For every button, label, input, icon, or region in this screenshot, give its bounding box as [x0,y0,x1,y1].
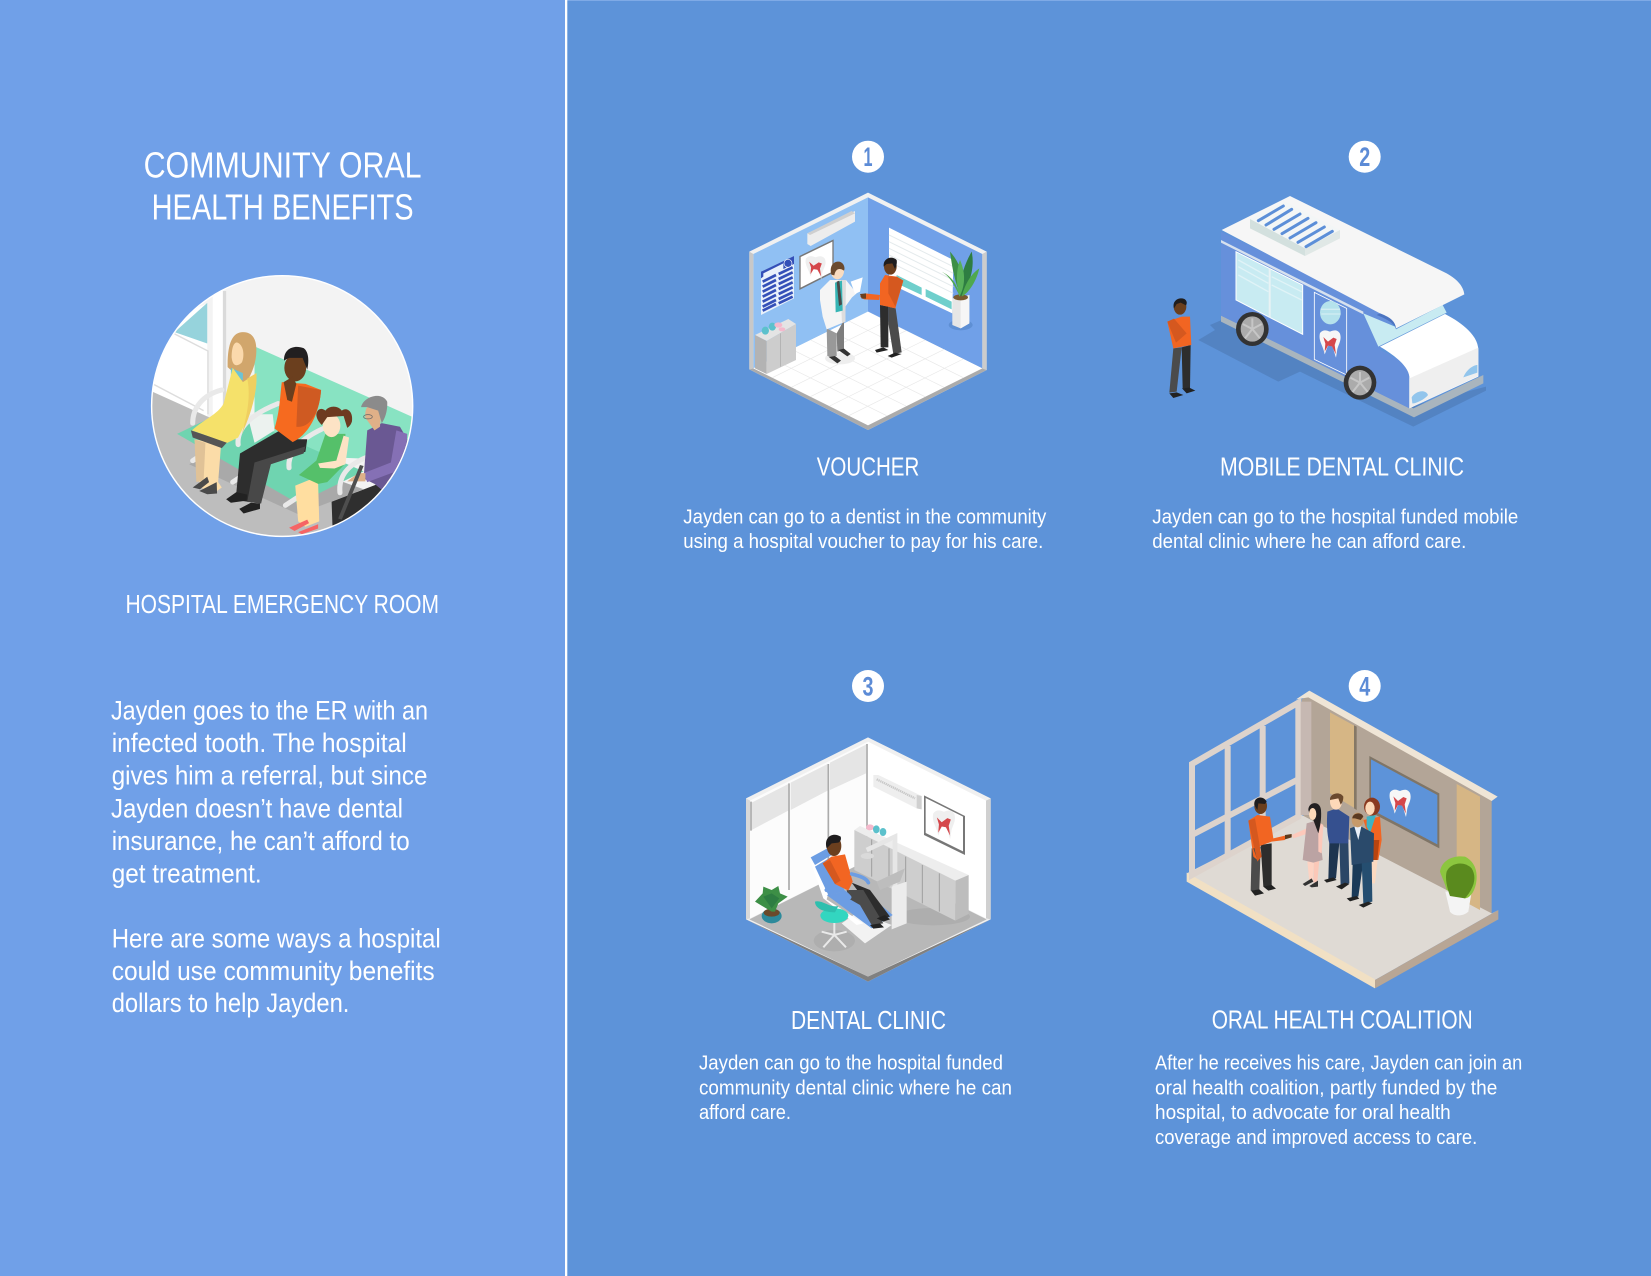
panel: voucher [683,141,1046,553]
older man in purple with cane [332,396,408,526]
body text: using a hospital voucher to pay for his care. [683,531,1043,553]
wall screen with tooth [1369,756,1439,848]
illustration: dental van [1167,196,1486,427]
text block: Jayden story: get treatment. [112,858,262,888]
Jayden standing [860,258,903,358]
roof vent [1250,202,1340,256]
text block: Jayden story: gives him a referral, but since [112,761,427,791]
air conditioner [873,775,922,809]
number badge 1 [852,141,884,173]
body text: dental clinic where he can afford care. [1152,531,1466,553]
cabinet with bottles [755,319,796,374]
girl in green dress [289,407,352,534]
notice board [761,256,794,315]
dental chair [810,848,893,943]
wheels [1236,312,1376,400]
Jayden seated [823,835,890,929]
number badge 1: 1 [864,142,872,172]
roof [1222,196,1464,328]
illustration: dental clinic room [746,737,991,982]
window frame wall [1192,703,1298,875]
title: COMMUNITY ORAL [144,144,422,186]
illustration: emergency room waiting area [145,271,422,543]
body text [683,506,1046,553]
illustration: coalition meeting room [1187,691,1498,988]
text block: Jayden story: insurance, he can’t afford to [112,826,410,856]
man in blue sweater [1324,793,1349,889]
window with blinds [889,228,953,313]
woman in yellow dress [191,332,256,494]
body text [1152,506,1518,553]
panel: oral health coalition [1155,670,1522,1149]
heading: MOBILE DENTAL CLINIC [1220,452,1464,482]
text block: Jayden story: infected tooth. The hospital [112,728,407,758]
door with tooth [1314,292,1347,375]
body text [699,1052,1012,1124]
stool [814,901,855,951]
text block: Jayden story [111,696,441,1018]
man in dark suit [1347,813,1374,908]
body text: hospital, to advocate for oral health [1155,1102,1451,1124]
woman in orange behind [1363,798,1382,883]
body text: Jayden can go to a dentist in the community [683,506,1046,528]
heading: DENTAL CLINIC [791,1005,946,1035]
title [144,144,422,228]
text block: Jayden story: dollars to help Jayden. [112,988,349,1018]
Jayden standing [1167,298,1195,398]
doctor in white coat [820,262,863,364]
body text: Jayden can go to the hospital funded mobile [1152,506,1518,528]
air conditioner [807,211,855,246]
body text: coverage and improved access to care. [1155,1127,1477,1149]
tooth poster [924,795,965,855]
Jayden shaking hands [1248,798,1292,896]
man in orange holding chin [226,347,321,514]
potted plant [755,886,788,923]
text block: Jayden story: Jayden goes to the ER with an [111,696,428,726]
body text: afford care. [699,1102,791,1124]
body text: oral health coalition, partly funded by the [1155,1077,1497,1099]
heading: ORAL HEALTH COALITION [1212,1005,1473,1035]
potted plant [1440,856,1477,915]
dental lamp and tray [861,837,907,929]
number badge 3: 3 [862,671,874,701]
title: HEALTH BENEFITS [152,187,414,228]
body text: Jayden can go to the hospital funded [699,1052,1003,1074]
wood panels [1330,712,1480,910]
number badge 3 [852,670,884,702]
panel: dental clinic [699,670,1012,1124]
text block: Jayden story: Jayden doesn’t have dental [111,793,403,823]
side windows [1236,252,1303,334]
panel: right background [567,0,1651,1276]
body text: After he receives his care, Jayden can join an [1155,1052,1522,1074]
panel: mobile dental clinic [1152,141,1518,553]
panel: left background [0,0,565,1276]
woman in pink dress [1292,803,1323,887]
body text: community dental clinic where he can [699,1077,1012,1099]
number badge 2: 2 [1359,142,1370,172]
label: hospital emergency room: HOSPITAL EMERGENCY ROOM [126,589,439,619]
number badge 4 [1349,670,1381,702]
text block: Jayden story: Here are some ways a hospital [112,924,441,954]
number badge 4: 4 [1359,671,1370,701]
counter and cabinets [854,824,970,925]
tooth poster [799,239,834,290]
number badge 2 [1349,141,1381,173]
illustration: doctor's office room [749,193,987,430]
heading: VOUCHER [817,452,919,482]
potted plant [942,252,979,330]
body text [1155,1052,1522,1149]
text block: Jayden story: could use community benefits [112,956,435,986]
